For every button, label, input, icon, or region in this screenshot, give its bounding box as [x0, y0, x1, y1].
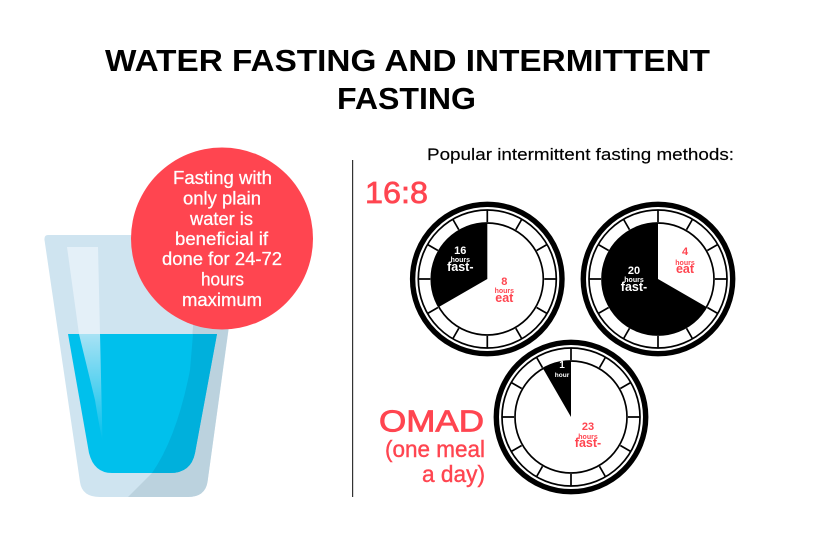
clock: 20 hours fast, 4 hours eat: hours	[624, 277, 644, 284]
callout: red circle	[131, 148, 313, 330]
label: OMAD: a day)	[422, 461, 485, 487]
callout: red circle: beneficial if	[175, 229, 269, 249]
clock: 20 hours fast, 4 hours eat: 20	[628, 265, 640, 277]
clock: 1 hour, 23 hours fast: 1	[559, 360, 565, 371]
clock: 16 hours fast, 8 hours eat	[413, 204, 562, 354]
callout: red circle: only plain	[183, 188, 261, 208]
title: WATER FASTING AND INTERMITTENT	[105, 43, 710, 78]
label: 16:8: 16:8	[365, 175, 428, 210]
callout: red circle: water is	[189, 209, 253, 229]
callout: red circle: Fasting with	[173, 168, 272, 188]
title: FASTING	[337, 81, 476, 116]
clock: 1 hour, 23 hours fast: 23	[582, 421, 594, 433]
clock: 16 hours fast, 8 hours eat: eat	[495, 291, 514, 305]
clock: 16 hours fast, 8 hours eat: 8	[501, 276, 507, 288]
label: OMAD	[379, 404, 485, 487]
clock: 16 hours fast, 8 hours eat: fast-	[447, 260, 474, 274]
clock: 1 hour, 23 hours fast: hours	[578, 434, 598, 441]
clock: 16 hours fast, 8 hours eat: hours	[495, 288, 514, 295]
callout: red circle: done for 24-72	[162, 249, 282, 269]
clock: 1 hour, 23 hours fast	[496, 342, 646, 492]
subheading: Popular intermittent fasting methods:	[427, 145, 734, 164]
clock: 16 hours fast, 8 hours eat: hours	[451, 257, 470, 264]
icon: glass of water	[44, 235, 241, 497]
clock: 20 hours fast, 4 hours eat	[583, 204, 733, 354]
clock: 20 hours fast, 4 hours eat: hours	[675, 260, 695, 267]
label: OMAD: (one meal	[385, 436, 485, 462]
clock: 20 hours fast, 4 hours eat: 4	[682, 246, 689, 258]
clock: 1 hour, 23 hours fast: hour	[555, 372, 570, 379]
clock: 20 hours fast, 4 hours eat: eat	[676, 262, 695, 276]
label: OMAD: OMAD	[379, 404, 484, 438]
title	[105, 43, 710, 116]
callout: red circle: hours	[201, 270, 244, 290]
clock: 1 hour, 23 hours fast: fast-	[575, 436, 601, 450]
clock: 16 hours fast, 8 hours eat: 16	[454, 245, 466, 257]
callout: red circle: maximum	[182, 290, 262, 310]
divider	[352, 160, 353, 497]
clock: 20 hours fast, 4 hours eat: fast-	[621, 280, 647, 294]
